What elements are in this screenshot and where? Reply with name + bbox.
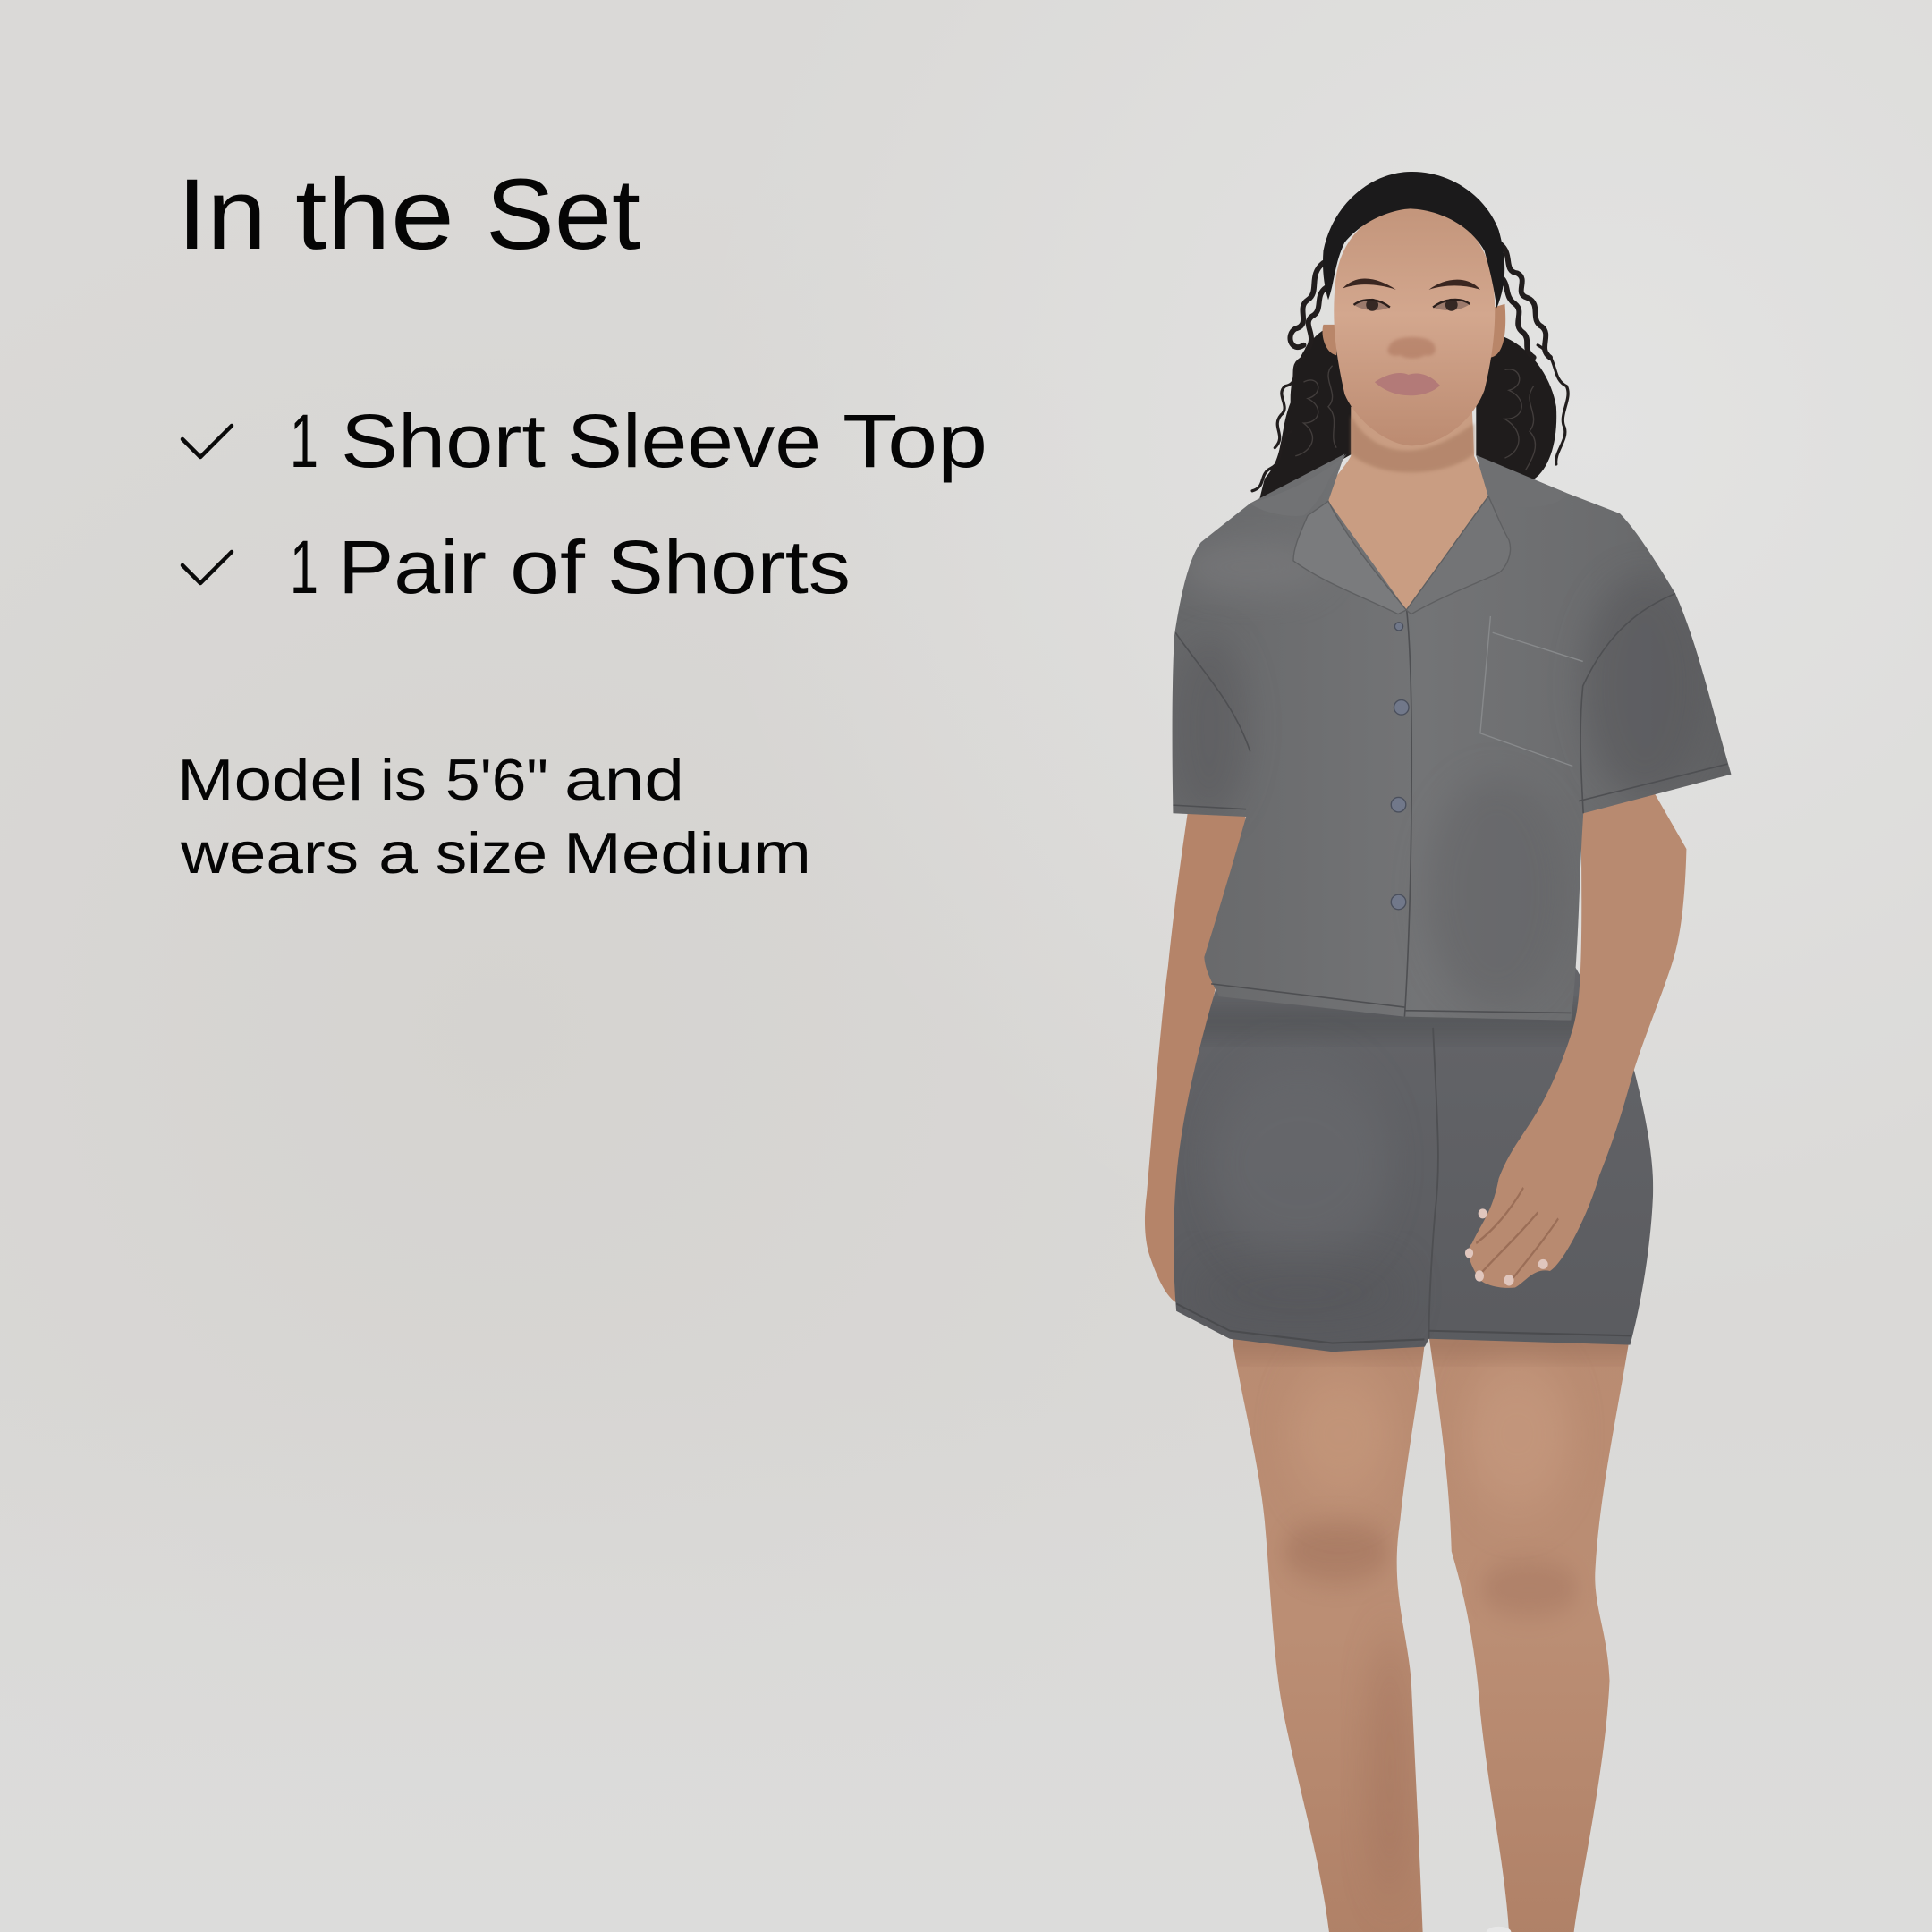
list item: shorts: Pair <box>338 525 487 609</box>
checklist <box>182 399 987 609</box>
left arm <box>1145 806 1246 1303</box>
fingernails <box>1465 1208 1548 1285</box>
list item: shorts: Shorts <box>607 525 851 609</box>
shorts <box>1164 960 1661 1360</box>
list item: top: Top <box>843 399 987 483</box>
list item: top <box>182 399 987 483</box>
hair: back curls <box>1252 244 1568 500</box>
neck and chest <box>1324 407 1490 614</box>
nose <box>1387 337 1436 359</box>
photo: model in grey pyjama set <box>1145 172 1739 1932</box>
model size note: a <box>378 820 419 886</box>
buttons <box>1391 623 1409 910</box>
icon: check mark <box>182 552 232 583</box>
model size note: and <box>564 747 684 812</box>
title: In <box>177 158 267 270</box>
face <box>1334 208 1495 445</box>
right arm and hand <box>1465 787 1686 1288</box>
title: the <box>295 158 454 270</box>
head, hair and torso <box>1164 172 1739 1031</box>
list item: top: Sleeve <box>567 399 821 483</box>
list item: shorts <box>182 525 851 609</box>
icon: check mark <box>182 426 232 457</box>
curl highlights <box>1295 366 1535 470</box>
model size note: Model <box>177 747 363 812</box>
list item: shorts: 1 <box>290 525 318 609</box>
model size note: size <box>436 820 547 886</box>
finger creases <box>1476 1188 1558 1284</box>
legs <box>1233 1338 1628 1932</box>
model size note: Medium <box>564 820 811 886</box>
eyes <box>1353 299 1470 311</box>
left collar and lapel <box>1250 454 1347 516</box>
lips <box>1375 373 1440 395</box>
right collar and lapel <box>1476 455 1566 507</box>
model size note <box>177 747 811 886</box>
model size note: 5'6" <box>445 747 548 812</box>
title <box>177 158 640 270</box>
pocket <box>1480 616 1583 767</box>
title: Set <box>486 158 640 270</box>
shirt seams <box>1173 594 1727 1017</box>
model size note: is <box>380 747 427 812</box>
hair: top <box>1323 172 1504 308</box>
shirt body <box>1164 448 1739 1031</box>
list item: shorts: of <box>510 525 586 609</box>
ears <box>1323 304 1505 358</box>
shoe hint <box>1487 1927 1511 1932</box>
model size note: wears <box>180 820 359 886</box>
list item: top: 1 <box>290 399 318 483</box>
eyebrows <box>1343 278 1480 290</box>
list item: top: Short <box>341 399 546 483</box>
